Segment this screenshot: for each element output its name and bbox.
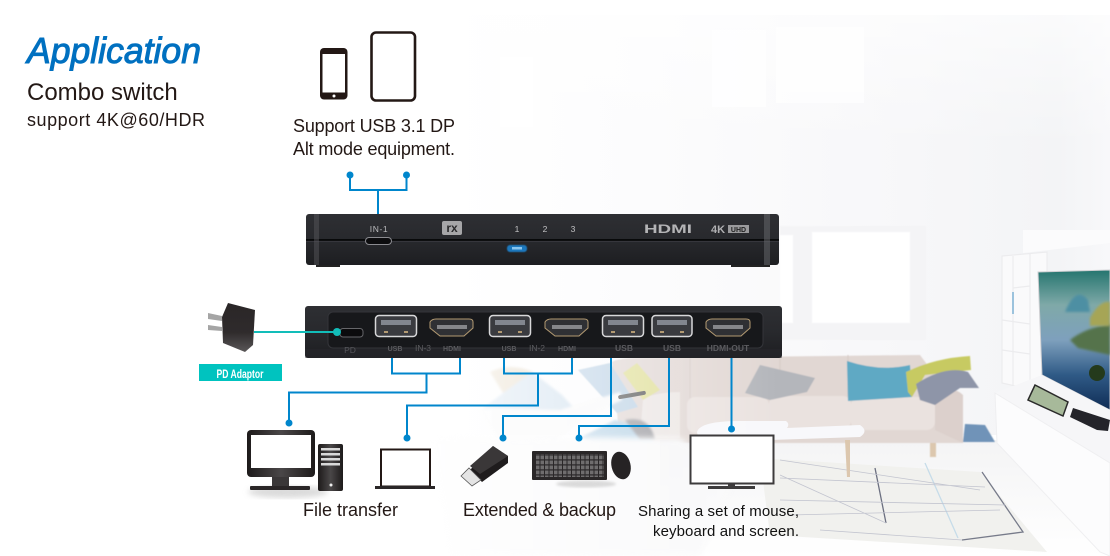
icon: tablet xyxy=(372,32,415,100)
port labels: IN-3 xyxy=(415,343,431,353)
phone on stand xyxy=(1028,385,1068,416)
wall cabinet top xyxy=(1023,230,1110,253)
icon: keyboard and mouse xyxy=(532,450,634,488)
connector: adaptor to PD port xyxy=(254,328,341,336)
HDMI logo: HDMI xyxy=(644,222,692,236)
port labels: HDMI-OUT xyxy=(707,343,750,353)
brand logo xyxy=(442,221,462,235)
indicator labels xyxy=(515,224,576,234)
IN-1 port xyxy=(366,224,392,244)
USB and HDMI ports group 2 xyxy=(490,316,588,336)
connectors: IN-3 to desktop and IN-2 to laptop xyxy=(286,358,572,442)
icon: PD adaptor xyxy=(208,303,255,352)
device on stand xyxy=(1070,408,1110,431)
icon: smartphone xyxy=(320,48,348,100)
IN-1 port: IN-1 xyxy=(370,224,388,234)
device: rear view xyxy=(305,306,782,358)
icon: desktop computer xyxy=(247,430,343,498)
icon: display xyxy=(690,436,774,489)
remote control xyxy=(618,391,646,399)
connectors: USB to flash drive and keyboard xyxy=(500,358,669,442)
label: PD Adaptor: PD Adaptor xyxy=(216,369,264,381)
subtitle: support 4K: support 4K@60/HDR xyxy=(27,110,205,130)
label: PD Adaptor xyxy=(199,364,282,381)
title: Application xyxy=(25,30,201,71)
connector: equipment to IN-1 xyxy=(346,172,410,216)
room wall xyxy=(450,15,1110,435)
text: supported equipment: Support USB 3.1 DP xyxy=(293,116,455,136)
port labels: HDMI xyxy=(443,346,461,353)
brand logo: rx xyxy=(446,221,458,235)
connector: HDMI-OUT to display xyxy=(728,358,735,432)
icon: laptop xyxy=(375,450,435,489)
text: sharing: keyboard and screen. xyxy=(653,523,799,540)
subtitle: combo switch: Combo switch xyxy=(27,79,178,106)
indicator labels: 2 xyxy=(543,224,548,234)
text: sharing xyxy=(638,503,799,540)
4K UHD logo: UHD xyxy=(731,227,746,234)
port labels: USB xyxy=(388,346,402,353)
sofa xyxy=(578,355,995,457)
white front sofa xyxy=(582,434,690,478)
indicator labels: 1 xyxy=(515,224,520,234)
blue LED xyxy=(507,245,527,252)
HDMI-OUT port xyxy=(706,319,750,336)
text: file transfer: File transfer xyxy=(303,500,398,520)
TV xyxy=(1038,270,1110,410)
text: supported equipment xyxy=(293,116,455,159)
text: sharing: Sharing a set of mouse, xyxy=(638,503,799,520)
icon: USB flash drive xyxy=(461,446,508,486)
port labels: USB xyxy=(663,343,681,353)
text: supported equipment: Alt mode equipment. xyxy=(293,139,455,159)
4K UHD logo xyxy=(711,224,749,236)
device: front view xyxy=(306,214,779,267)
floor xyxy=(660,440,1110,556)
indicator labels: 3 xyxy=(571,224,576,234)
port labels xyxy=(388,343,750,353)
upper windows xyxy=(500,27,864,127)
port labels: USB xyxy=(502,346,516,353)
text: extended and backup: Extended & backup xyxy=(463,500,616,520)
port labels: HDMI xyxy=(558,346,576,353)
coffee table xyxy=(697,421,864,477)
shared USB ports xyxy=(602,316,692,336)
4K UHD logo: 4K xyxy=(711,224,725,236)
PD port: PD xyxy=(344,345,356,355)
woman on sofa xyxy=(486,366,655,440)
port labels: USB xyxy=(615,343,633,353)
room window xyxy=(780,226,926,340)
port labels: IN-2 xyxy=(529,343,545,353)
rug xyxy=(760,458,1047,552)
USB and HDMI ports group 3 xyxy=(376,316,473,336)
shelves xyxy=(1002,252,1047,393)
PD port xyxy=(340,328,363,355)
background: living room xyxy=(486,74,1110,556)
TV stand xyxy=(995,375,1110,556)
